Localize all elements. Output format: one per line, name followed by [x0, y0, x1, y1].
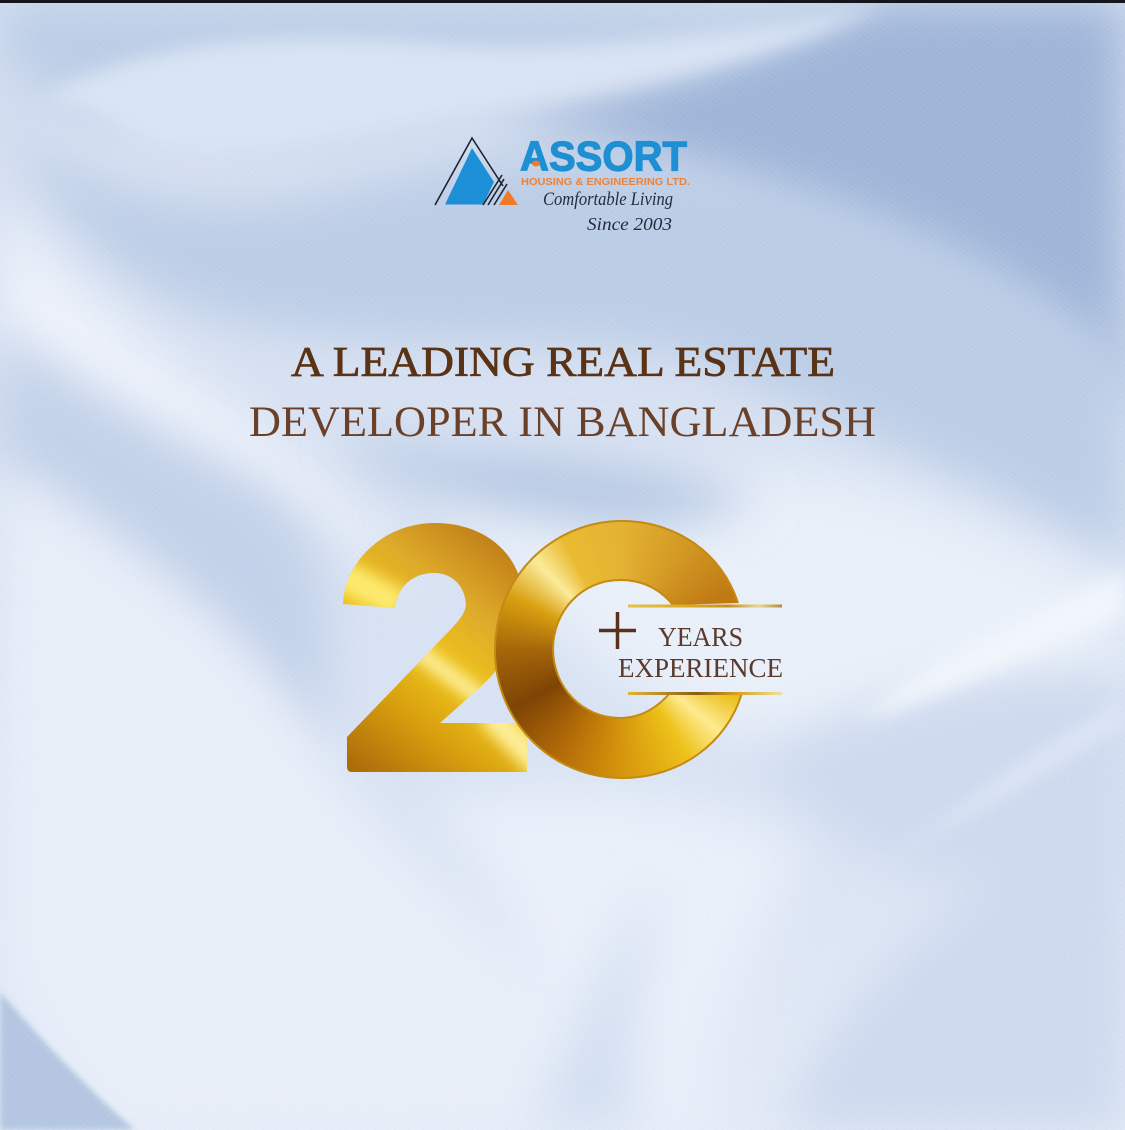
heading line 2: DEVELOPER IN BANGLADESH: [249, 399, 876, 446]
plus sign: [599, 612, 636, 649]
numeral 2: [343, 523, 527, 772]
lower gold rule: [628, 692, 782, 695]
since line: Since 2003: [587, 214, 672, 234]
heading line 1: A LEADING REAL ESTATE: [291, 340, 835, 386]
upper gold rule: [628, 604, 782, 608]
company subtitle: HOUSING & ENGINEERING LTD.: [521, 176, 690, 188]
badge: 20+ years experience: [343, 520, 782, 779]
brand name: ASSORT: [520, 132, 687, 180]
experience label: EXPERIENCE: [618, 653, 783, 683]
years label: YEARS: [658, 622, 743, 652]
numeral 0: [494, 520, 742, 779]
icon: orange dot in A: [532, 160, 540, 166]
logo: Assort Housing & Engineering: [435, 132, 690, 234]
heading: [249, 340, 876, 446]
icon: triangle mark: [435, 138, 518, 205]
tagline: Comfortable Living: [543, 189, 673, 210]
